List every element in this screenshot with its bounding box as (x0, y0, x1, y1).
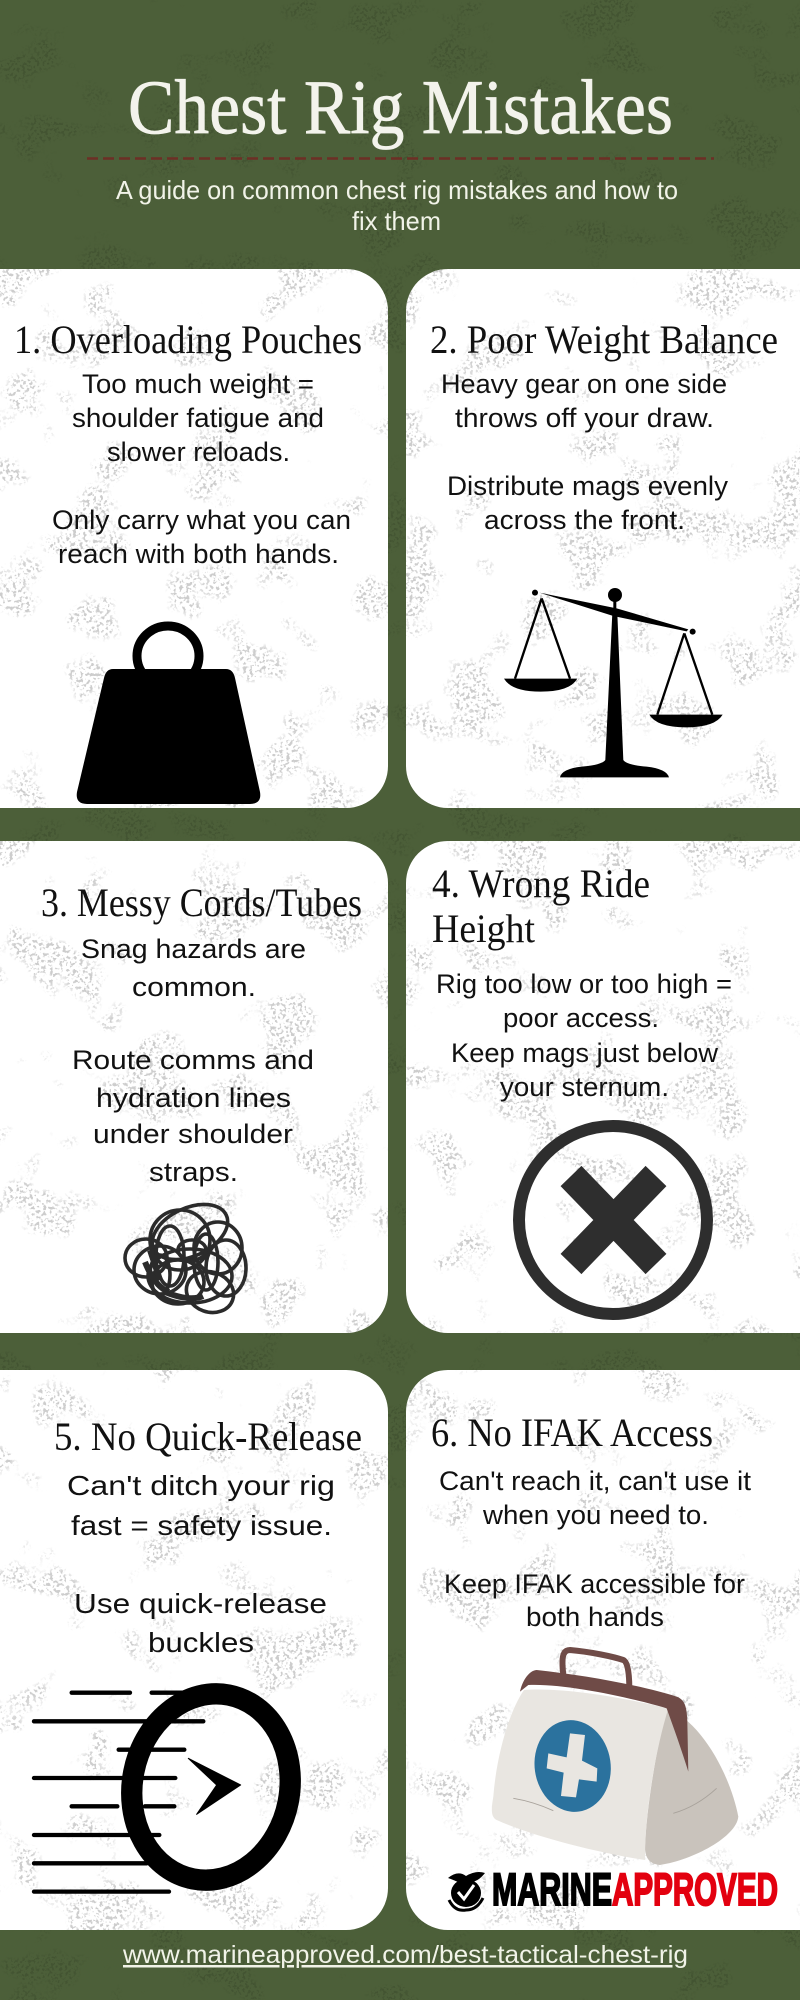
heading 6: 6. No IFAK Access (431, 1410, 713, 1455)
heading 5: 5. No Quick-Release (54, 1414, 362, 1459)
icon: tangled cords (125, 1193, 246, 1319)
body text 3: Route comms and (72, 1045, 314, 1075)
logo emblem (448, 1872, 485, 1910)
body text 6: Can't reach it, can't use it (439, 1466, 752, 1496)
logo wordmark: MARINE (492, 1864, 612, 1915)
body text 4: Keep mags just below (451, 1038, 718, 1068)
body text 1 (52, 369, 351, 569)
title: Chest Rig Mistakes (128, 64, 673, 150)
body text 3: straps. (149, 1157, 238, 1187)
body text 4 (436, 969, 732, 1102)
icon: x in circle (519, 1126, 707, 1314)
body text 3: under shoulder (93, 1119, 293, 1149)
body text 5: buckles (148, 1627, 254, 1658)
body text 2: Distribute mags evenly (447, 471, 729, 501)
panel: wrong ride height (432, 861, 732, 1314)
body text 4: poor access. (503, 1003, 659, 1033)
body text 4: Rig too low or too high = (436, 969, 732, 999)
body text 5: Use quick-release (74, 1588, 327, 1619)
body text 3: common. (132, 972, 256, 1002)
header (87, 64, 714, 236)
panel: messy cords (41, 880, 362, 1319)
body text 2: throws off your draw. (455, 403, 714, 433)
panel: overloading pouches (14, 317, 362, 804)
body text 1: Too much weight = (82, 369, 314, 399)
body text 2: Heavy gear on one side (441, 369, 727, 399)
body text 1: Only carry what you can (52, 505, 351, 535)
heading 4 line 2: Height (432, 906, 535, 951)
body text 5: fast = safety issue. (71, 1510, 332, 1541)
body text 5 (67, 1470, 335, 1658)
body text 1: shoulder fatigue and (72, 403, 324, 433)
icon: weight (77, 626, 260, 804)
body text 3: hydration lines (96, 1083, 291, 1113)
body text 1: reach with both hands. (58, 539, 339, 569)
icon: scales (504, 588, 723, 777)
logo wordmark (492, 1864, 778, 1915)
title underline (87, 157, 714, 160)
body text 6 (439, 1466, 752, 1632)
body text 4: your sternum. (500, 1072, 669, 1102)
subtitle: A guide on common chest rig mistakes and how to (116, 175, 678, 205)
body text 2: across the front. (484, 505, 685, 535)
body text 3 (72, 934, 314, 1187)
logo: marine approved (448, 1864, 778, 1915)
heading 4: 4. Wrong Ride (432, 861, 650, 906)
body text 5: Can't ditch your rig (67, 1470, 335, 1501)
footer link: www.marineapproved.com/best-tactical-chest-rig (122, 1941, 688, 1969)
body text 6: Keep IFAK accessible for (444, 1569, 745, 1599)
body text 6: both hands (526, 1602, 664, 1632)
body text 6: when you need to. (482, 1500, 709, 1530)
subtitle: fix them (352, 206, 441, 236)
subtitle (116, 175, 678, 236)
icon: fast clock (34, 1680, 306, 1894)
panel: no quick release (34, 1414, 362, 1894)
body text 2 (441, 369, 729, 535)
heading 1: 1. Overloading Pouches (14, 317, 362, 362)
icon: first aid bag (492, 1650, 738, 1865)
heading 3: 3. Messy Cords/Tubes (41, 880, 362, 925)
panel: poor weight balance (430, 317, 778, 777)
body text 3: Snag hazards are (81, 934, 306, 964)
body text 1: slower reloads. (107, 437, 290, 467)
heading 2: 2. Poor Weight Balance (430, 317, 778, 362)
panel: no ifak access (431, 1410, 778, 1915)
